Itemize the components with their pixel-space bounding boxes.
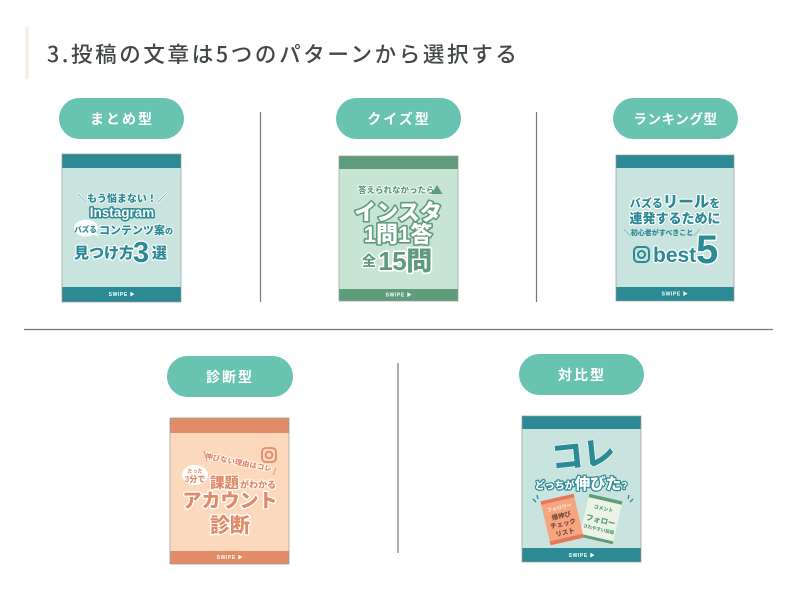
mini card: green: されやすい投稿 bbox=[583, 522, 615, 536]
card: 対比型 bbox=[522, 416, 641, 562]
mini card: orange: リスト bbox=[555, 527, 576, 539]
card: 診断型: アカウント bbox=[182, 490, 278, 512]
mini card: orange bbox=[540, 494, 584, 545]
card: まとめ型 bbox=[62, 154, 181, 302]
label: ランキング型 bbox=[613, 98, 738, 139]
card: 診断型: 3分で bbox=[185, 474, 205, 484]
icon: warning triangle bbox=[432, 185, 442, 194]
card: クイズ型: 15問 bbox=[378, 246, 432, 276]
card: まとめ型: ＼もう悩まない！／ bbox=[77, 192, 167, 205]
card: 対比型: SWIPE ▶ bbox=[569, 553, 595, 559]
card: クイズ型: 全 bbox=[362, 253, 376, 269]
mini card: orange: チェック bbox=[549, 516, 577, 531]
title bbox=[25, 27, 520, 79]
card: まとめ型: 見つけ方 bbox=[74, 244, 134, 262]
card: ランキング型 bbox=[616, 155, 734, 301]
label: まとめ型 bbox=[59, 98, 184, 139]
mini card: green: フォロー bbox=[585, 513, 616, 528]
label: まとめ型: まとめ型 bbox=[90, 109, 154, 129]
mini card: green bbox=[579, 494, 623, 544]
mini card: orange: 爆伸び bbox=[551, 509, 572, 522]
label: クイズ型 bbox=[336, 98, 461, 139]
card: まとめ型: バズる bbox=[74, 224, 97, 234]
icon: instagram bbox=[634, 247, 649, 262]
label: 対比型 bbox=[519, 354, 644, 395]
card: 診断型: 伸びない理由はコレ bbox=[204, 451, 273, 473]
card: 診断型: 診断 bbox=[210, 514, 250, 537]
label: 診断型 bbox=[167, 356, 293, 397]
card: 診断型: たった bbox=[187, 468, 203, 475]
mini card: green: コメント bbox=[593, 504, 614, 514]
title: 3.投稿の文章は5つのパターンから選択する bbox=[47, 38, 520, 69]
card: クイズ型: SWIPE ▶ bbox=[386, 292, 412, 298]
card: クイズ型: インスタ bbox=[354, 200, 442, 225]
card: ランキング型: best bbox=[653, 244, 696, 267]
card: 診断型: 課題がわかる bbox=[210, 475, 276, 492]
label: クイズ型: クイズ型 bbox=[367, 109, 431, 129]
card: クイズ型: 答えられなかったら bbox=[358, 185, 435, 195]
card: ランキング型: ＼初心者がすべきこと／ bbox=[624, 228, 700, 237]
card: ランキング型: SWIPE ▶ bbox=[662, 292, 688, 298]
card: まとめ型: 3 bbox=[133, 237, 149, 269]
card: 対比型: どっちが伸びた? bbox=[535, 474, 627, 493]
card: ランキング型: 連発するために bbox=[629, 211, 721, 226]
card: 診断型: SWIPE ▶ bbox=[217, 555, 243, 561]
card: まとめ型: 選 bbox=[152, 245, 167, 262]
card: まとめ型: Instagram bbox=[90, 205, 154, 220]
card: クイズ型 bbox=[339, 156, 458, 301]
label: ランキング型: ランキング型 bbox=[633, 108, 718, 128]
card: 診断型 bbox=[170, 418, 289, 564]
card: まとめ型: SWIPE ▶ bbox=[109, 292, 135, 298]
card: まとめ型: コンテンツ案の bbox=[99, 223, 173, 237]
label: 対比型: 対比型 bbox=[558, 365, 606, 385]
card: ランキング型: 5 bbox=[696, 228, 718, 272]
card: 対比型: コレ bbox=[549, 434, 617, 476]
label: 診断型: 診断型 bbox=[206, 367, 254, 387]
card: ランキング型: バズるリールを bbox=[630, 194, 720, 211]
mini card: orange: フォロワー bbox=[547, 503, 572, 514]
icon: instagram bbox=[262, 448, 276, 462]
card: クイズ型: 1問1答 bbox=[364, 222, 432, 247]
